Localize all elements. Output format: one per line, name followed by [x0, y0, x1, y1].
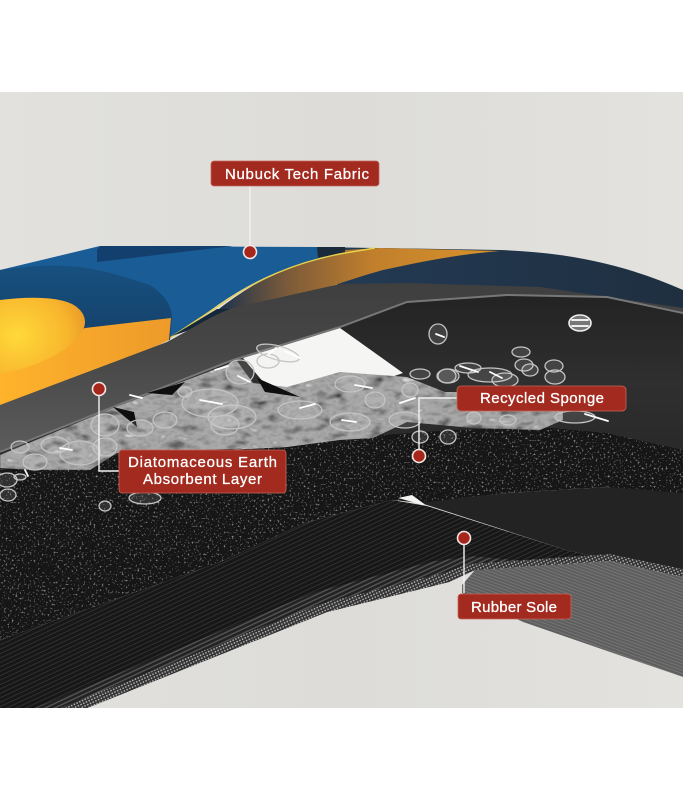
upper layer: blue fabric — [0, 246, 340, 400]
rubber sole right flank — [462, 561, 683, 677]
upper layer: dark navy fabric — [317, 247, 683, 312]
callout: Diatomaceous Earth Absorbent Layer — [92, 382, 286, 493]
water droplets — [0, 315, 608, 511]
water highlights — [25, 320, 608, 476]
dark corner patch — [317, 247, 345, 258]
callout: Rubber Sole: Rubber Sole — [471, 599, 557, 616]
callout: Diatomaceous Earth Absorbent Layer: Diatomaceous Earth — [128, 454, 277, 471]
callout: Nubuck Tech Fabric: Nubuck Tech Fabric — [225, 166, 370, 183]
white gap — [243, 328, 403, 395]
lower dark lobe — [418, 487, 683, 572]
background panel — [0, 92, 683, 708]
callout: Recycled Sponge — [412, 386, 626, 462]
rubber sole weave — [0, 500, 610, 708]
rubber sole rim — [60, 554, 683, 708]
upper layer: orange fabric sweep — [215, 248, 500, 312]
blue fold shadow — [97, 246, 233, 262]
callout: Recycled Sponge: Recycled Sponge — [480, 390, 604, 407]
navy dome — [0, 266, 172, 375]
callout: Rubber Sole — [458, 532, 571, 619]
yellow seam — [170, 248, 375, 338]
water mass — [0, 361, 563, 470]
callout: Diatomaceous Earth Absorbent Layer: Absorbent Layer — [143, 471, 262, 488]
sponge layer — [0, 427, 683, 640]
insole highlight edge — [0, 295, 683, 452]
yellow sphere — [0, 298, 85, 373]
dark patches in water — [113, 378, 300, 427]
rubber sole lighter weave band — [35, 556, 560, 708]
grey insole layer — [0, 283, 683, 452]
callout: Nubuck Tech Fabric — [211, 161, 379, 258]
dark wedge under blue — [172, 309, 257, 336]
orange layer — [0, 318, 171, 406]
insole cross-section illustration — [0, 246, 683, 708]
dark underside of top layer — [0, 295, 683, 470]
white triangle gap — [398, 495, 427, 506]
